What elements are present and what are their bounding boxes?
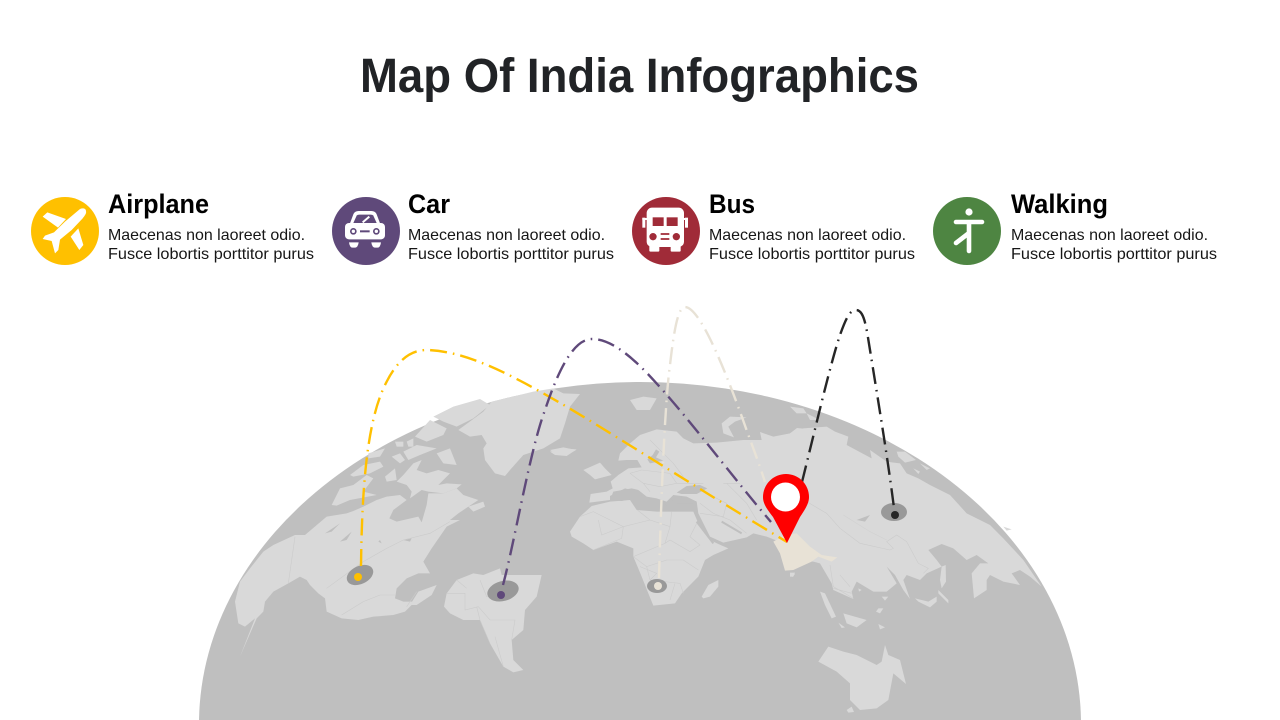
route: walking arc <box>802 310 907 521</box>
heading: bus: Bus <box>709 189 755 219</box>
icon: location pin on India <box>763 474 809 543</box>
description: bus: Maecenas non laoreet odio. <box>709 227 906 244</box>
land: Arctic islands and Australia <box>630 397 906 713</box>
icon: bus <box>632 197 700 265</box>
legend: car <box>332 189 614 265</box>
land: North America <box>235 399 490 657</box>
route: airplane arc <box>344 350 787 589</box>
title: Map Of India Infographics <box>360 50 919 103</box>
heading: car: Car <box>408 189 450 219</box>
description: bus: Fusce lobortis porttitor purus <box>709 246 915 263</box>
route: car arc <box>485 339 771 605</box>
land: Asia <box>790 407 1042 629</box>
heading: airplane: Airplane <box>108 189 209 219</box>
land: Europe, Africa, Middle East <box>550 428 817 606</box>
heading: walking: Walking <box>1011 189 1108 219</box>
description: car: Maecenas non laoreet odio. <box>408 227 605 244</box>
icon: airplane <box>31 197 99 265</box>
legend: bus <box>632 189 915 265</box>
description: airplane: Maecenas non laoreet odio. <box>108 227 305 244</box>
globe map <box>199 382 1081 720</box>
description: car: Fusce lobortis porttitor purus <box>408 246 614 263</box>
description: airplane: Fusce lobortis porttitor purus <box>108 246 314 263</box>
description: walking: Maecenas non laoreet odio. <box>1011 227 1208 244</box>
route: bus arc <box>647 307 765 593</box>
icon: walking figure <box>933 197 1001 265</box>
legend: walking <box>933 189 1217 265</box>
India highlight <box>773 533 837 571</box>
icon: car <box>332 197 400 265</box>
legend: airplane <box>31 189 314 265</box>
land: Greenland and South America <box>444 388 580 672</box>
description: walking: Fusce lobortis porttitor purus <box>1011 246 1217 263</box>
globe sphere <box>199 382 1081 720</box>
